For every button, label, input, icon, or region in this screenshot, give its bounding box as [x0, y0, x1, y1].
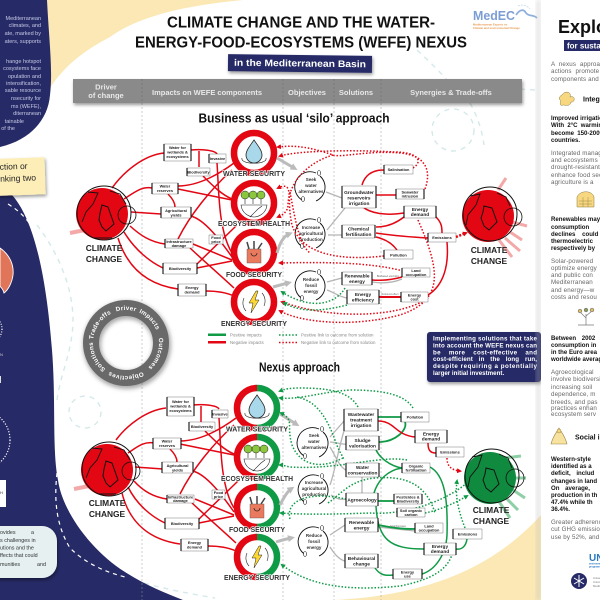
silo: ecosystem health: ECOSYSTEM HEALTH	[218, 221, 290, 228]
nexus: solution and outcome boxes: treatment	[350, 418, 372, 424]
nexus: solution and outcome boxes: change	[353, 562, 370, 568]
text block: agroecology body: ecosystem serv	[551, 411, 597, 418]
callout: implementing solutions: despite requiring a potentially	[433, 363, 538, 370]
icon: social person	[551, 428, 567, 444]
callout: left lower: and	[37, 562, 46, 568]
callout: implementing solutions: be more cost-effective and	[433, 350, 537, 356]
nexus: solution and outcome boxes: Pollution	[407, 414, 424, 420]
nexus: impact boxes: reserves	[159, 443, 175, 448]
nexus: impact boxes: Energy	[188, 540, 202, 545]
nexus: solution and outcome boxes: Water	[356, 465, 369, 471]
cycle ring: Impacts	[139, 308, 159, 330]
nexus: solution and outcome boxes: use	[404, 574, 412, 578]
legend: Negative impacts	[230, 340, 264, 345]
nexus: solution and outcome boxes: Sludge	[354, 438, 371, 444]
header bar: column titles: Solutions	[339, 88, 373, 97]
panel: left intro navy: intensification,	[6, 81, 41, 87]
nexus: objective increase agricultural production	[298, 474, 328, 504]
panel: left intro navy: ms (WEFE),	[11, 104, 41, 110]
cycle ring: Solutions	[90, 342, 105, 372]
text block: social bold: On average,	[551, 485, 590, 492]
panel: left intro navy: Mediterranean	[6, 16, 41, 22]
nexus: impact boxes: Water for	[172, 399, 189, 404]
nexus: red outcome links	[378, 421, 460, 471]
text block: renewables bold: consumption	[551, 224, 590, 231]
silo: solution and outcome boxes: energy	[349, 279, 365, 285]
heading: nexus approach: Nexus approach	[259, 360, 340, 374]
nexus: objective seek water alternatives: Seek	[309, 433, 320, 438]
text block: agroecology body	[551, 369, 600, 418]
text block: integrated bold	[551, 115, 600, 144]
logo: MedEC: Climate and environmental Change	[473, 26, 520, 30]
vertical column guides	[142, 103, 381, 600]
text block: social bold: Western-style	[551, 456, 591, 463]
text block: renewables body: and public con	[551, 272, 593, 279]
silo: solution and outcome boxes: Land	[411, 268, 421, 273]
silo: impact boxes: Invasive	[210, 156, 226, 161]
logo: MedEC	[473, 5, 537, 30]
icon: integrated puzzle	[559, 92, 574, 105]
text block: agroecology body: increasing soil	[551, 384, 592, 391]
nexus: solution and outcome boxes: Energy	[423, 432, 439, 438]
silo: solution and outcome boxes: Salinisation	[388, 167, 410, 172]
nexus: solution and outcome boxes: Solar/biomass	[390, 525, 407, 528]
legend: Positive impacts	[230, 332, 263, 338]
nexus: objective seek water alternatives: alternatives	[301, 445, 327, 450]
silo: objective increase agricultural production: agricultural	[299, 231, 323, 236]
silo: solution and outcome boxes: fertilisation	[346, 232, 371, 238]
silo: climate change globe right: CLIMATE	[471, 245, 508, 255]
text block: renewables body: optimize energy	[551, 265, 598, 272]
background: yellow corner bottom	[333, 515, 541, 600]
silo: impact boxes: Biodiversity	[187, 170, 210, 174]
nexus: solution and outcome boxes: Energy	[432, 544, 448, 550]
text block: integrated bold: countries.	[551, 137, 580, 144]
title: CLIMATE CHANGE AND THE WATER-	[167, 14, 435, 32]
silo: impact boxes: Agricultural	[165, 208, 187, 213]
text block: agroecology bold: in the Euro area	[551, 349, 598, 356]
silo: red impact links	[112, 150, 236, 296]
nexus: climate change globe left	[74, 442, 140, 519]
panel: left lower navy: H	[0, 490, 3, 495]
nexus: solution and outcome boxes: demand	[422, 436, 440, 442]
silo: red dotted arrow to globe	[456, 233, 466, 237]
heading: business as usual: Business as usual ‘silo’ approach	[198, 112, 390, 126]
callout: implementing solutions: Implementing solutions that take	[433, 336, 538, 342]
silo: objective increase agricultural production: production	[299, 237, 323, 242]
nexus: solution and outcome boxes: Soil organic	[400, 508, 423, 513]
nexus: objective increase agricultural production: production	[302, 492, 326, 497]
nexus: objective increase agricultural production: Increase	[305, 480, 324, 485]
silo: objective increase agricultural production	[295, 218, 325, 248]
silo: solution and outcome boxes: Pollution	[390, 252, 407, 258]
text block: social bold	[551, 456, 598, 513]
title	[135, 14, 467, 52]
silo: impact boxes: wetlands &	[166, 150, 188, 154]
sticky note: nking two	[0, 173, 36, 184]
text block: social bold: deficit, includ	[551, 470, 595, 477]
text block: integrated body	[551, 150, 600, 186]
text block: agroecology bold: consumption in	[551, 342, 597, 349]
silo: solution and outcome boxes: Chemical	[348, 226, 369, 232]
text block: renewables body: and energy—w	[551, 287, 595, 294]
nexus: objective reduce fossil energy: Reduce	[306, 533, 323, 538]
silo: impact boxes: reserves	[157, 188, 173, 193]
nexus: solution and outcome boxes: occupation	[419, 528, 440, 532]
panel: left intro navy: climates, and	[9, 23, 41, 29]
text block: renewables body	[551, 258, 598, 301]
silo: solution and outcome boxes: Rebound effect	[382, 293, 399, 296]
silo: impact boxes: Energy	[185, 285, 199, 290]
text block: agroecology body: breeds, and pas	[551, 399, 598, 406]
nexus: impact boxes: Water	[162, 438, 173, 444]
icon: plant	[578, 308, 594, 325]
callout: left lower	[0, 526, 57, 578]
silo: impact boxes: price	[211, 239, 221, 244]
text block: renewables bold	[551, 216, 600, 252]
callout: left lower: a	[31, 530, 34, 536]
silo: objective reduce fossil energy: Reduce	[303, 277, 320, 282]
callout: implementing solutions: into account the WEFE nexus can	[433, 342, 537, 350]
nexus: grey arrows from impacts to objectives	[276, 414, 415, 561]
text block: renewables body: Mediterranean	[551, 279, 593, 286]
nexus: solution and outcome boxes: Pesticides &	[396, 494, 420, 500]
callout: left lower: ovides	[0, 530, 16, 536]
nexus: energy security: ENERGY SECURITY	[224, 575, 290, 582]
nexus: water security	[226, 388, 288, 434]
silo: solution and outcome boxes: Energy	[412, 207, 428, 213]
callout: left lower: munities	[0, 562, 20, 568]
silo: impact boxes: Food	[211, 235, 221, 240]
nexus: objective reduce fossil energy: fossil	[308, 539, 320, 544]
silo: impact boxes: Water for	[169, 145, 186, 150]
text block: integrated body: agriculture is a	[551, 179, 594, 186]
nexus: solution and outcome boxes: Land	[424, 524, 434, 528]
nexus: solution and outcome boxes: irrigation	[351, 423, 371, 429]
nexus: solution and outcome boxes: Behavioural	[348, 556, 375, 562]
nexus: solid outcome links	[374, 417, 467, 575]
silo: solution and outcome boxes: Renewable	[344, 274, 370, 280]
callout: implementing solutions: larger initial investment.	[433, 370, 504, 377]
silo: objective reduce fossil energy: energy	[304, 289, 319, 294]
silo: impact boxes: damage	[172, 243, 187, 248]
silo: solution and outcome boxes: reservoirs	[347, 196, 371, 202]
nexus: impact boxes: price	[214, 494, 224, 499]
nexus: energy security	[224, 537, 290, 582]
nexus: impact boxes: Biodiversity	[171, 521, 194, 526]
silo: objective seek water alternatives: water	[304, 183, 317, 188]
nexus: objective seek water alternatives	[297, 426, 328, 458]
title: ENERGY-FOOD-ECOSYSTEMS (WEFE) NEXUS	[135, 34, 467, 52]
text block: integrated body: and ecosystems	[551, 157, 598, 164]
text block: agroecology body: dependence, m	[551, 391, 596, 398]
text block: social bold: changes in land	[551, 478, 597, 485]
silo: objective reduce fossil energy: fossil	[305, 283, 317, 288]
nexus: water security: WATER SECURITY	[226, 426, 288, 434]
text block: social bold: identified as a	[551, 463, 592, 470]
text block: renewables bold: respectively by	[551, 245, 596, 252]
nexus: solution and outcome boxes: fertilisation	[406, 468, 427, 472]
silo: solution and outcome boxes: Emissions	[432, 235, 452, 240]
legend: Negative link to outcome from solution	[301, 340, 376, 345]
legend	[208, 332, 376, 345]
silo: solution and outcome boxes: irrigation	[349, 201, 369, 207]
callout: left lower: utions and the	[0, 546, 34, 552]
nexus: food security	[229, 487, 285, 534]
silo: impact boxes: Infrastructure	[166, 239, 192, 244]
nexus: climate change globe right: CLIMATE	[473, 505, 510, 515]
text block: social body: use by 52%, and	[551, 534, 600, 541]
silo: solution and outcome boxes: Bio-based electricity	[377, 275, 400, 278]
text block: integrated body: drought-resistant	[551, 164, 600, 171]
nexus: ecosystem health	[221, 437, 293, 483]
nexus: solution and outcome boxes: Agroecology	[347, 498, 377, 504]
text block: renewables body: Solar-powered	[551, 258, 594, 265]
nexus: objective seek water alternatives: water	[307, 439, 320, 444]
nexus: solution and outcome boxes: energy	[354, 526, 370, 532]
panel: left intro navy: of the	[1, 126, 15, 132]
silo: climate change globe right	[462, 178, 527, 266]
silo: solution and outcome boxes: Energy	[355, 292, 371, 298]
nexus: climate change globe left: CLIMATE	[89, 498, 126, 508]
header bar: column titles: Driver	[95, 82, 117, 92]
cycle ring: Objectives	[108, 372, 144, 380]
nexus: dotted outcome links	[280, 388, 467, 588]
logo: MedEC: MedEC	[473, 8, 516, 23]
silo: solution and outcome boxes: cost	[410, 296, 419, 302]
silo: impact boxes: demand	[185, 290, 200, 294]
nexus: solution and outcome boxes: valorisation	[349, 444, 376, 450]
header bar: column titles: Objectives	[288, 88, 326, 97]
silo: objective seek water alternatives	[295, 170, 325, 202]
silo: objective reduce fossil energy	[295, 270, 325, 300]
header bar: column titles: Synergies & Trade-offs	[410, 88, 492, 97]
logo: university	[571, 573, 600, 589]
text block: renewables bold: Renewables may	[551, 216, 600, 223]
nexus: impact boxes: Infrastructure	[168, 494, 194, 500]
nexus: objective increase agricultural production: agricultural	[302, 486, 326, 491]
panel: left intro navy: ate, marked by	[5, 31, 41, 37]
panel: left intro navy	[0, 0, 51, 147]
callout: left lower: ffects that could	[0, 553, 38, 559]
nexus: solution and outcome boxes: carbon	[405, 512, 418, 517]
nexus: red impact links	[116, 405, 238, 551]
silo: solution and outcome boxes: occupation	[406, 272, 427, 277]
panel: left intro navy: sable resource	[5, 88, 41, 94]
subtitle band: in the Mediterranean Basin	[234, 58, 366, 70]
nexus: climate change globe right: CHANGE	[473, 516, 510, 526]
silo: grey arrows from impacts to objectives	[273, 158, 347, 298]
text block: renewables bold: thermoelectric	[551, 238, 594, 245]
text block: agroecology body: practices enhan	[551, 405, 597, 412]
header bar: column titles: Impacts on WEFE components	[152, 88, 262, 97]
panel: left lower navy: N	[0, 352, 3, 357]
nexus: impact boxes: damage	[173, 498, 189, 503]
nexus: solution and outcome boxes: Biodiversity	[397, 498, 420, 504]
silo: impact boxes: Water	[160, 184, 171, 188]
panel: right text column: components and	[551, 76, 599, 83]
silo: ecosystem health	[218, 183, 290, 228]
nexus: solution and outcome boxes	[344, 409, 482, 579]
silo: climate change globe left: CHANGE	[86, 254, 123, 264]
silo: water security: WATER SECURITY	[223, 171, 285, 178]
nexus: impact boxes: Agricultural	[167, 463, 188, 468]
header bar: column titles: of change	[88, 91, 124, 100]
nexus: climate change globe right	[464, 449, 526, 526]
silo: energy security: ENERGY SECURITY	[221, 321, 287, 328]
sticky note	[0, 157, 46, 196]
silo: food security	[226, 232, 282, 279]
text block: social body	[551, 519, 600, 541]
nexus: ecosystem health: ECOSYSTEM HEALTH	[221, 476, 293, 483]
silo: climate change globe left	[70, 186, 136, 264]
silo: water security	[223, 133, 285, 178]
cycle ring	[80, 298, 174, 392]
panel: right text column	[536, 0, 600, 600]
text block: renewables bold: declines could	[551, 231, 599, 238]
panel: left intro navy: cosystems face	[3, 66, 41, 72]
nexus: objective reduce fossil energy: energy	[307, 545, 322, 550]
silo: impact boxes	[152, 144, 226, 296]
silo: impact boxes: yields	[170, 212, 182, 218]
silo: objective seek water alternatives: Seek	[306, 177, 317, 182]
panel: right text column: actions promote	[551, 68, 600, 75]
text block: agroecology bold	[550, 335, 600, 363]
nexus: food security: FOOD SECURITY	[229, 527, 285, 534]
callout: implementing solutions	[427, 332, 541, 382]
text block: social bold: 36.4%.	[551, 506, 570, 513]
silo: impact boxes: Biodiversity	[169, 266, 192, 271]
silo: solution and outcome boxes: Groundwater	[344, 190, 374, 196]
silo: objective seek water alternatives: alternatives	[298, 189, 324, 194]
legend: Positive link to outcome from solution	[301, 332, 374, 338]
nexus: impact boxes: demand	[187, 544, 203, 550]
panel: left intro navy: aters, supports	[5, 39, 41, 45]
silo: solution and outcome boxes: efficiency	[352, 298, 374, 304]
nexus: objective reduce fossil energy	[298, 526, 328, 556]
cycle ring: Driver	[116, 306, 136, 312]
silo: impact boxes: ecosystems	[166, 154, 189, 159]
nexus: impact boxes: ecosystems	[169, 408, 192, 413]
silo: solution and outcome boxes	[342, 165, 456, 304]
nexus: solution and outcome boxes: Energy	[401, 570, 415, 574]
nexus: impact boxes: yields	[172, 468, 183, 472]
nexus: impact boxes: Biodiversity	[191, 424, 214, 429]
text block: agroecology bold: Between 2002	[551, 335, 596, 342]
silo: solution and outcome boxes: Energy	[408, 292, 422, 298]
panel: left intro navy: opulation and	[8, 74, 41, 80]
nexus: impact boxes: Food	[214, 490, 224, 495]
nexus: solution and outcome boxes: Wastewater	[348, 412, 374, 418]
silo: solution and outcome boxes: demand	[411, 212, 429, 218]
nexus: solution and outcome boxes: Organic	[409, 464, 424, 468]
nexus: climate change globe left: CHANGE	[89, 509, 126, 519]
text block: social bold: 47.4% while th	[551, 499, 593, 506]
logo: MedEC: Mediterranean Experts on	[473, 22, 508, 26]
panel: left lower navy	[0, 195, 183, 600]
nexus: impact boxes	[153, 397, 229, 551]
nexus: impact boxes: wetlands &	[169, 404, 191, 408]
cycle ring: Trade-offs	[89, 311, 110, 339]
background: pale dashed curves	[37, 50, 535, 598]
subtitle band	[228, 54, 372, 73]
nexus: impact boxes: Invasive	[212, 412, 229, 416]
nexus: solution and outcome boxes: conservation	[348, 470, 377, 476]
silo: solution and outcome boxes: intrusion	[402, 194, 419, 198]
cycle ring: Outcomes	[148, 338, 164, 370]
panel: left intro navy: hange hotspot	[6, 59, 41, 65]
sticky note: ction or	[0, 161, 28, 172]
silo: solution and outcome boxes: Seawater	[401, 190, 419, 194]
background: yellow corner top	[47, 0, 243, 92]
callout: implementing solutions: cost-efficient in the long run,	[433, 356, 537, 363]
text block: renewables body: costs and resou	[551, 294, 597, 301]
silo: food security: FOOD SECURITY	[226, 272, 282, 279]
panel: left intro navy: tainable	[5, 119, 24, 125]
text block: social bold: production in th	[551, 492, 598, 499]
nexus: solution and outcome boxes: Renewable	[349, 520, 374, 526]
silo: climate change globe left: CLIMATE	[86, 243, 123, 253]
panel: left intro navy: diterranean	[13, 111, 41, 117]
icon: solar building	[577, 192, 594, 207]
silo: energy security	[221, 282, 287, 328]
text block: agroecology body: Agroecological	[551, 369, 594, 376]
header bar: column titles	[73, 79, 522, 103]
panel: left intro navy: nsecurity for	[11, 96, 41, 102]
nexus: solution and outcome boxes: Emissions	[440, 450, 460, 454]
callout: left lower: s challenges in	[0, 538, 36, 544]
silo: objective increase agricultural production: Increase	[302, 225, 321, 230]
silo: solid outcome links	[362, 170, 447, 297]
silo: climate change globe right: CHANGE	[471, 256, 508, 266]
nexus: solution and outcome boxes: Emissions	[458, 532, 477, 536]
silo: dotted outcome links	[278, 146, 434, 322]
nexus: solution and outcome boxes: demand	[431, 549, 449, 555]
